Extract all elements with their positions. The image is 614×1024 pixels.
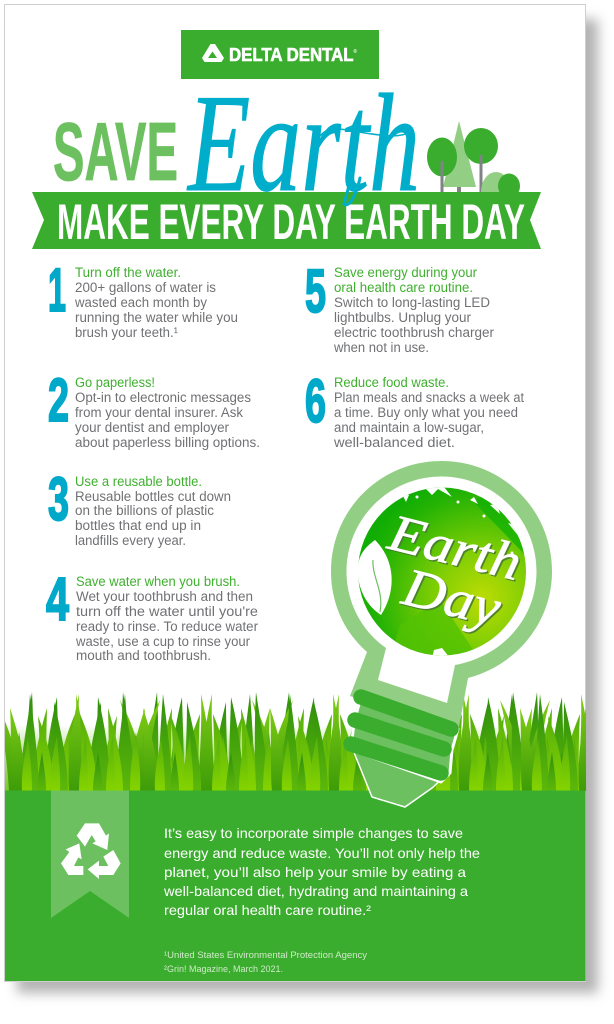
step 4 text: mouth and toothbrush. xyxy=(76,648,211,663)
step 2 xyxy=(48,366,260,450)
step 3 xyxy=(48,465,231,548)
step 1 text: running the water while you xyxy=(75,310,238,325)
bulb glass outline xyxy=(331,461,552,732)
Earth script swashes xyxy=(320,129,410,205)
step 5 text: oral health care routine. xyxy=(334,280,473,295)
step 1 xyxy=(48,256,238,340)
footer band xyxy=(5,790,586,981)
step 6 text: Plan meals and snacks a week at xyxy=(334,390,524,405)
step 2 text: about paperless billing options. xyxy=(75,435,260,450)
green circle with Earth Day xyxy=(358,488,526,656)
step 1 text: Turn off the water. xyxy=(75,265,181,280)
step 1 text xyxy=(74,265,238,340)
step 5 xyxy=(305,257,494,355)
step 3 text: on the billions of plastic xyxy=(75,503,214,518)
icon: recycle xyxy=(61,823,121,879)
icon: leaf xyxy=(358,540,392,615)
closing message: It’s easy to incorporate simple changes to save xyxy=(164,825,463,841)
step 2 text: from your dental insurer. Ask xyxy=(75,405,243,420)
title: Save: SAVE xyxy=(53,105,178,198)
icon: delta triangle xyxy=(202,44,224,62)
number 3: 3 xyxy=(48,465,69,533)
bulb inner white xyxy=(346,476,536,703)
Earth Day lettering xyxy=(382,504,527,638)
step 4 text xyxy=(75,574,258,663)
Earth Day lettering: Day xyxy=(396,556,507,638)
trees illustration xyxy=(427,121,520,212)
closing message xyxy=(163,825,480,918)
footnotes xyxy=(164,950,367,975)
lightbulb xyxy=(331,461,552,807)
bulb screw rings xyxy=(351,697,451,773)
step 2 text: Opt-in to electronic messages xyxy=(75,390,251,405)
number 2: 2 xyxy=(48,366,69,434)
bulb screw tip xyxy=(353,750,445,807)
grass xyxy=(0,692,614,791)
step 3 text: Use a reusable bottle. xyxy=(75,474,202,489)
step 5 text: when not in use. xyxy=(333,340,429,355)
step 3 text xyxy=(75,474,231,548)
ribbon xyxy=(51,790,129,918)
footnotes: ²Grin! Magazine, March 2021. xyxy=(164,964,283,975)
logo wordmark: DELTA DENTAL xyxy=(229,45,362,65)
closing message: planet, you’ll also help your smile by eating a xyxy=(164,864,466,880)
step 4 xyxy=(46,565,258,663)
bulb screw body xyxy=(351,697,458,782)
logo wordmark: ® xyxy=(354,48,357,55)
step 2 text xyxy=(75,375,260,450)
step 6 text: and maintain a low-sugar, xyxy=(334,420,484,435)
step 6 text: a time. Buy only what you need xyxy=(334,405,518,420)
footnotes: ¹United States Environmental Protection Agency xyxy=(164,950,367,961)
Earth Day lettering: Earth xyxy=(382,504,527,592)
closing message: energy and reduce waste. You’ll not only help the xyxy=(164,845,480,861)
step 4 text: Save water when you brush. xyxy=(76,574,240,589)
step 6 text: Reduce food waste. xyxy=(334,375,449,390)
step 6 xyxy=(305,367,524,450)
logo: Delta Dental xyxy=(181,30,379,79)
step 2 text: Go paperless! xyxy=(75,375,155,390)
number 5: 5 xyxy=(305,257,326,325)
title: Earth script: Earth xyxy=(187,66,420,221)
step 4 text: Wet your toothbrush and then xyxy=(76,589,253,604)
number 1: 1 xyxy=(48,256,66,324)
step 5 text xyxy=(333,265,494,355)
step 4 text: turn off the water until you're xyxy=(76,604,258,619)
banner xyxy=(32,192,541,249)
step 3 text: Reusable bottles cut down xyxy=(75,489,231,504)
step 3 text: landfills every year. xyxy=(75,533,186,548)
step 3 text: bottles that end up in xyxy=(75,518,201,533)
step 4 text: ready to rinse. To reduce water xyxy=(76,619,258,634)
step 6 text xyxy=(333,375,524,450)
step 6 text: well-balanced diet. xyxy=(333,435,455,450)
step 1 text: 200+ gallons of water is xyxy=(75,280,216,295)
step 1 text: brush your teeth.¹ xyxy=(75,325,178,340)
step 5 text: Save energy during your xyxy=(334,265,477,280)
step 1 text: wasted each month by xyxy=(74,295,207,310)
step 5 text: Switch to long-lasting LED xyxy=(334,295,490,310)
step 4 text: waste, use a cup to rinse your xyxy=(75,634,250,649)
number 6: 6 xyxy=(305,367,326,435)
step 2 text: your dentist and employer xyxy=(75,420,229,435)
number 4: 4 xyxy=(46,565,69,633)
closing message: regular oral health care routine.² xyxy=(164,902,371,918)
step 5 text: lightbulbs. Unplug your xyxy=(334,310,471,325)
closing message: well-balanced diet, hydrating and maintaining a xyxy=(163,883,468,899)
step 5 text: electric toothbrush charger xyxy=(334,325,494,340)
